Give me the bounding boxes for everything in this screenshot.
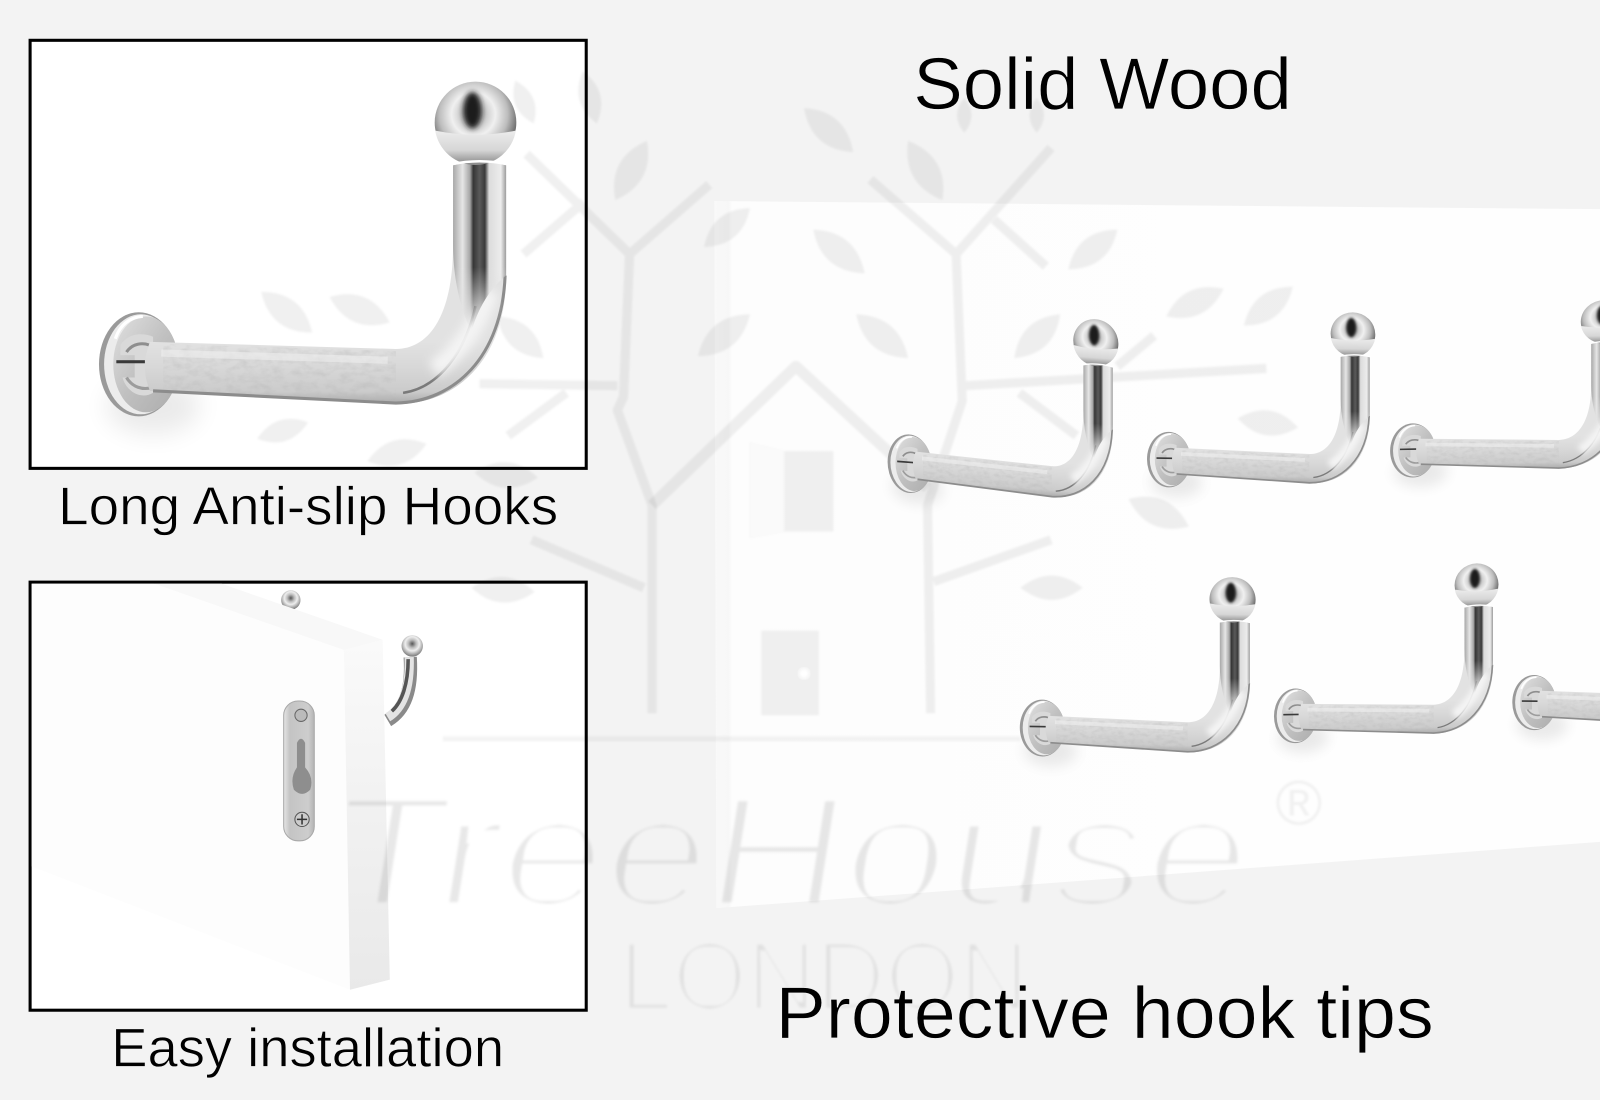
watermark: TreeHouse London logo bbox=[257, 71, 1322, 1031]
board top bevel bbox=[154, 584, 294, 610]
heading: solid wood: Solid Wood bbox=[913, 42, 1292, 125]
icon: wall hook 5 bbox=[1274, 563, 1498, 753]
panel: easy installation photo bbox=[30, 582, 586, 1010]
icon: wall hook 2 bbox=[1147, 309, 1375, 501]
heading: protective hook tips: Protective hook tips bbox=[776, 971, 1434, 1054]
watermark: LONDON wordmark: LONDON bbox=[619, 921, 1029, 1031]
board side face bbox=[345, 699, 390, 990]
photo content: board with keyhole bracket bbox=[32, 584, 423, 990]
icon: wall hook 1 bbox=[888, 303, 1118, 520]
watermark: leaves bbox=[257, 71, 1298, 603]
watermark: house window and door bbox=[750, 443, 833, 715]
icon: wall hook 4 bbox=[1020, 573, 1256, 770]
caption: easy installation: Easy installation bbox=[111, 1016, 504, 1078]
watermark: TreeHouse wordmark: TreeHouse bbox=[319, 763, 1266, 940]
icon: rear hook tip bbox=[281, 590, 423, 720]
panel: long anti-slip hooks photo frame bbox=[30, 40, 586, 468]
watermark: TreeHouse wordmark: ® bbox=[1276, 768, 1322, 838]
icon: wall hook 3 bbox=[1390, 300, 1600, 488]
photo frame bbox=[30, 582, 586, 1010]
panel: white wooden board bbox=[714, 201, 1600, 908]
icon: keyhole bracket bbox=[284, 701, 314, 841]
icon: wall hook 6 bbox=[1512, 553, 1600, 742]
board front face bbox=[32, 584, 155, 866]
icon: large chrome hook close-up bbox=[99, 82, 516, 435]
caption: long anti-slip hooks: Long Anti-slip Hooks bbox=[58, 476, 558, 536]
watermark: two trees and house lines bbox=[443, 148, 1266, 739]
